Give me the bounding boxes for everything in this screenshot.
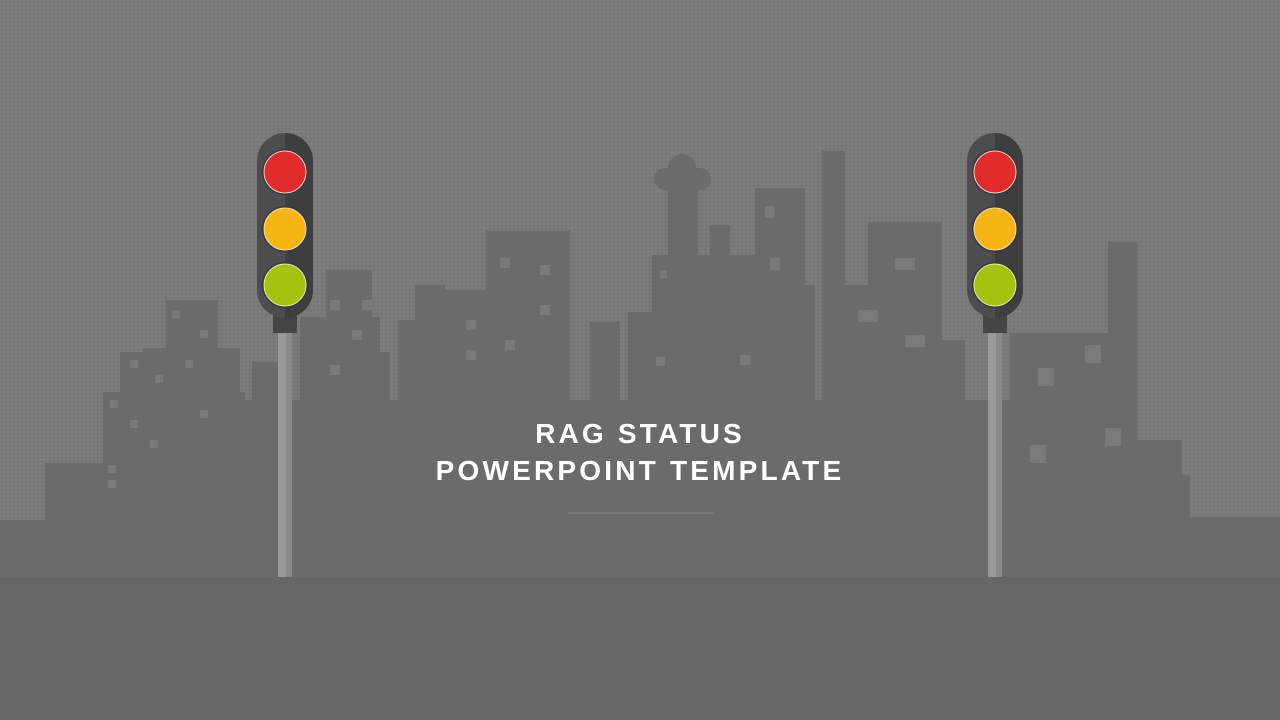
skyline (0, 151, 1280, 583)
title: RAG STATUS (535, 418, 745, 449)
ground (0, 577, 1280, 720)
traffic light: right (967, 133, 1023, 577)
windows (108, 206, 1121, 488)
traffic light: left (257, 133, 313, 577)
subtitle: POWERPOINT TEMPLATE (436, 455, 844, 486)
